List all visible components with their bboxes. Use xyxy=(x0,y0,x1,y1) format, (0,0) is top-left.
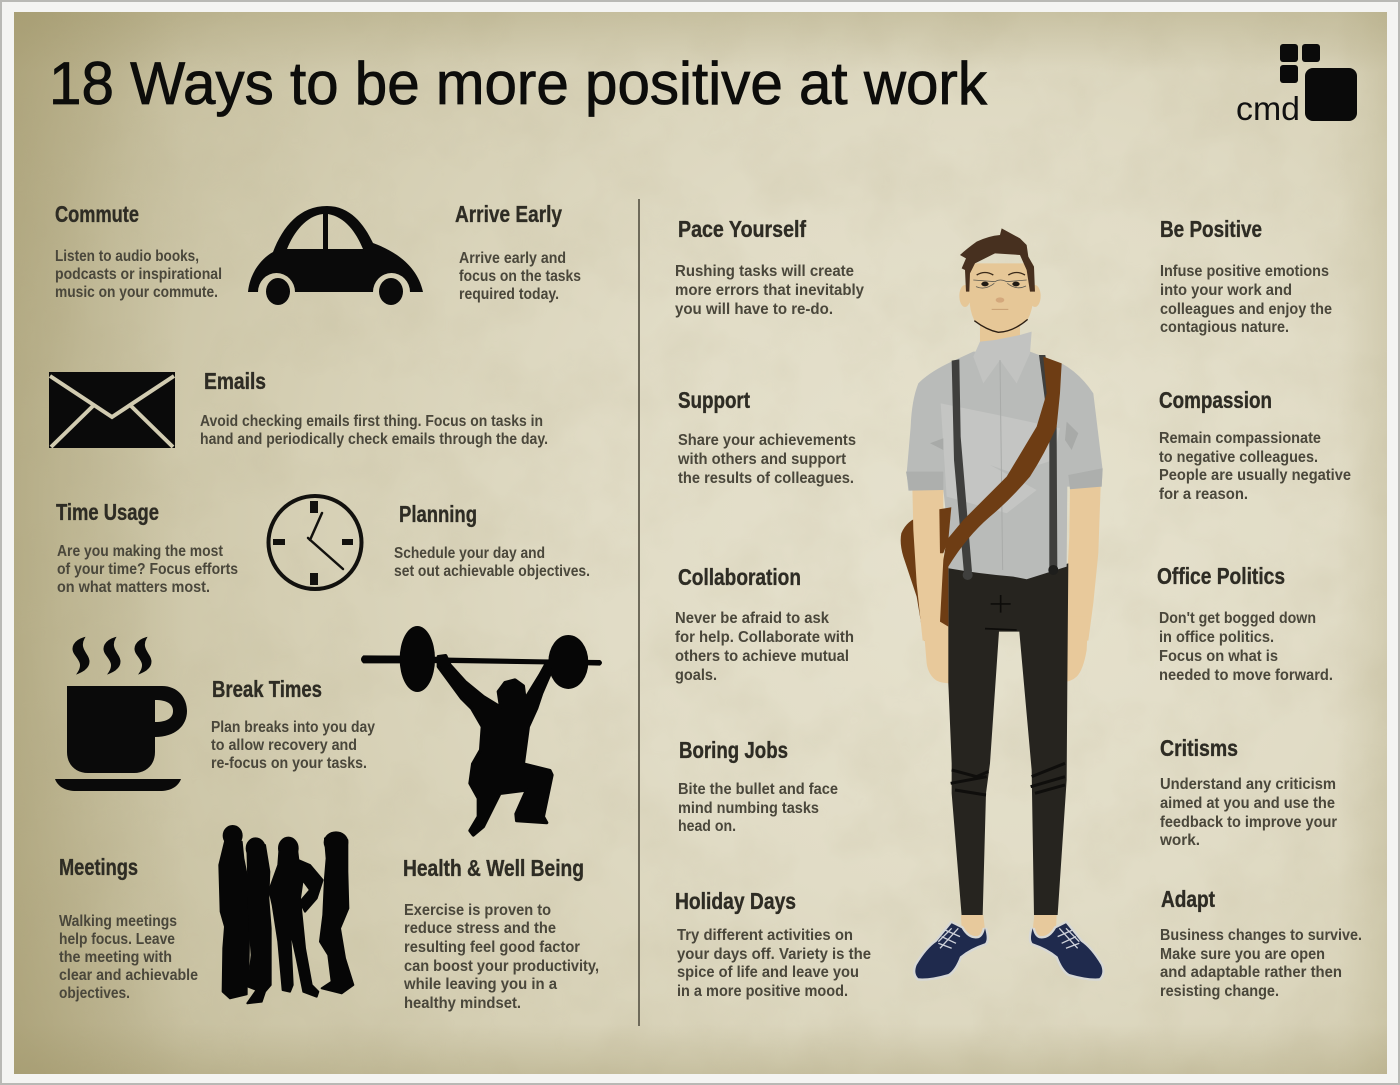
text: office politics: needed to move forward. xyxy=(1159,667,1333,684)
text: arrive early: focus on the tasks xyxy=(459,268,581,285)
heading: arrive early: Arrive Early xyxy=(455,201,562,227)
logo: cmd xyxy=(1236,44,1357,127)
text: pace yourself: you will have to re-do. xyxy=(675,301,833,318)
text: break times: to allow recovery and xyxy=(211,737,357,754)
text: health and well being: while leaving you in a xyxy=(403,976,557,993)
text: collaboration: for help. Collaborate with xyxy=(675,629,854,646)
man: head xyxy=(959,228,1041,332)
text: health and well being: resulting feel good factor xyxy=(404,939,580,956)
text: adapt: resisting change. xyxy=(1160,983,1279,1000)
heading: boring jobs: Boring Jobs xyxy=(679,737,788,763)
icon: coffee cup xyxy=(55,638,187,791)
text: collaboration xyxy=(675,610,854,684)
text: emails: hand and periodically check emails through the day. xyxy=(200,431,548,448)
text: critisms: work. xyxy=(1159,832,1200,849)
text: commute: Listen to audio books, xyxy=(55,248,199,265)
text: break times: re-focus on your tasks. xyxy=(211,755,367,772)
text: health and well being: can boost your productivity, xyxy=(404,958,599,975)
heading: health and well being: Health & Well Being xyxy=(403,855,584,881)
text: be positive: Infuse positive emotions xyxy=(1160,263,1329,280)
text: office politics xyxy=(1159,610,1333,684)
illustration: man with satchel xyxy=(901,228,1103,978)
text: boring jobs: Bite the bullet and face xyxy=(678,781,838,798)
heading: collaboration: Collaboration xyxy=(678,564,801,590)
panel: support xyxy=(677,387,856,487)
man: trousers xyxy=(948,563,1068,916)
text: holiday days: in a more positive mood. xyxy=(677,983,848,1000)
text: time usage: Are you making the most xyxy=(57,543,224,560)
heading: emails: Emails xyxy=(204,368,266,394)
text: support: Share your achievements xyxy=(678,432,856,449)
text: critisms: feedback to improve your xyxy=(1160,814,1337,831)
text: holiday days: your days off. Variety is the xyxy=(677,946,871,963)
text: meetings: Walking meetings xyxy=(59,913,177,930)
text: planning: Schedule your day and xyxy=(394,545,545,562)
icon: clock xyxy=(268,496,362,589)
text: critisms: aimed at you and use the xyxy=(1160,795,1335,812)
text: office politics: Don't get bogged down xyxy=(1159,610,1316,627)
panel: break times xyxy=(211,676,375,772)
heading: planning: Planning xyxy=(399,501,477,527)
panel: commute xyxy=(55,201,222,301)
text: health and well being: healthy mindset. xyxy=(404,995,521,1012)
icon: car xyxy=(248,206,423,292)
man: left shoe xyxy=(915,915,987,978)
text: boring jobs xyxy=(678,781,838,835)
text: holiday days: Try different activities on xyxy=(677,927,853,944)
text: boring jobs: mind numbing tasks xyxy=(678,800,819,817)
panel: collaboration xyxy=(675,564,854,684)
man: bag front flap xyxy=(939,507,951,553)
text: adapt: Make sure you are open xyxy=(1160,946,1325,963)
text: time usage: of your time? Focus efforts xyxy=(57,561,238,578)
text: office politics: in office politics. xyxy=(1159,629,1274,646)
icon: group of people xyxy=(219,826,353,1003)
text: commute xyxy=(55,248,222,301)
text: time usage xyxy=(57,543,238,596)
text: arrive early: Arrive early and xyxy=(459,250,566,267)
man: suspenders xyxy=(952,355,1058,580)
text: planning xyxy=(394,545,590,580)
title: 18 Ways to be more positive at work xyxy=(49,50,988,117)
text: emails: Avoid checking emails first thing. Focus on tasks in xyxy=(200,413,543,430)
man: right shoe xyxy=(1031,915,1102,978)
man: neck xyxy=(980,323,1020,358)
heading: office politics: Office Politics xyxy=(1157,563,1285,589)
text: adapt: Business changes to survive. xyxy=(1160,927,1362,944)
icon: envelope xyxy=(49,372,175,448)
text: break times xyxy=(211,719,375,772)
heading: break times: Break Times xyxy=(212,676,322,702)
text: collaboration: others to achieve mutual xyxy=(675,648,849,665)
text: health and well being xyxy=(403,902,599,1012)
text: arrive early xyxy=(459,250,581,303)
text: be positive: into your work and xyxy=(1160,282,1292,299)
panel: compassion xyxy=(1159,387,1351,503)
text: pace yourself xyxy=(675,263,864,318)
text: holiday days: spice of life and leave you xyxy=(677,964,859,981)
text: adapt: and adaptable rather then xyxy=(1160,964,1342,981)
text: arrive early: required today. xyxy=(459,286,559,303)
text: be positive: colleagues and enjoy the xyxy=(1160,301,1332,318)
heading: holiday days: Holiday Days xyxy=(675,888,796,914)
text: health and well being: Exercise is proven to xyxy=(404,902,551,919)
text: time usage: on what matters most. xyxy=(57,579,210,596)
text: adapt xyxy=(1160,927,1362,1000)
logo: cmd: cmd xyxy=(1236,90,1300,127)
divider xyxy=(638,199,640,1026)
text: pace yourself: Rushing tasks will create xyxy=(675,263,854,280)
text: boring jobs: head on. xyxy=(678,818,736,835)
heading: commute: Commute xyxy=(55,201,139,227)
panel: arrive early xyxy=(455,201,581,303)
text: office politics: Focus on what is xyxy=(1159,648,1278,665)
heading: time usage: Time Usage xyxy=(56,499,159,525)
man: arms xyxy=(912,487,1101,683)
text: support xyxy=(677,432,856,487)
text: meetings: objectives. xyxy=(59,985,130,1002)
man: bag back xyxy=(901,516,937,641)
heading: meetings: Meetings xyxy=(59,854,138,880)
text: commute: music on your commute. xyxy=(55,284,218,301)
text: support: with others and support xyxy=(677,451,847,468)
panel: adapt xyxy=(1160,886,1362,1000)
panel: emails xyxy=(200,368,548,448)
text: support: the results of colleagues. xyxy=(678,470,854,487)
heading: critisms: Critisms xyxy=(1160,735,1238,761)
panel: time usage xyxy=(56,499,238,596)
text: planning: set out achievable objectives. xyxy=(394,563,590,580)
heading: adapt: Adapt xyxy=(1161,886,1215,912)
text: collaboration: goals. xyxy=(675,667,717,684)
text: meetings: the meeting with xyxy=(59,949,172,966)
panel: be positive xyxy=(1160,216,1332,336)
text: collaboration: Never be afraid to ask xyxy=(675,610,829,627)
panel: critisms xyxy=(1159,735,1337,849)
heading: compassion: Compassion xyxy=(1159,387,1272,413)
text: pace yourself: more errors that inevitably xyxy=(675,282,864,299)
man: shirt xyxy=(906,332,1103,579)
text: meetings xyxy=(59,913,198,1002)
man: knee creases xyxy=(951,763,1065,795)
heading: be positive: Be Positive xyxy=(1160,216,1262,242)
panel: office politics xyxy=(1157,563,1333,684)
text: be positive xyxy=(1160,263,1332,336)
text: break times: Plan breaks into you day xyxy=(211,719,375,736)
text: compassion: People are usually negative xyxy=(1159,467,1351,484)
heading: pace yourself: Pace Yourself xyxy=(678,216,806,242)
text: be positive: contagious nature. xyxy=(1160,319,1289,336)
panel: holiday days xyxy=(675,888,871,1000)
text: compassion: for a reason. xyxy=(1159,486,1248,503)
text: compassion xyxy=(1159,430,1351,503)
text: compassion: to negative colleagues. xyxy=(1159,449,1318,466)
panel: boring jobs xyxy=(678,737,838,835)
icon: car wheels xyxy=(266,278,403,305)
icon: weightlifter xyxy=(361,626,602,835)
panel: planning xyxy=(394,501,590,580)
text: holiday days xyxy=(677,927,871,1000)
panel: pace yourself xyxy=(675,216,864,318)
panel: meetings xyxy=(59,854,198,1002)
text: meetings: help focus. Leave xyxy=(59,931,175,948)
text: critisms xyxy=(1159,776,1337,849)
text: emails xyxy=(200,413,548,448)
heading: support: Support xyxy=(678,387,750,413)
man: satchel strap xyxy=(940,357,1062,627)
panel: health and well being xyxy=(403,855,599,1012)
text: health and well being: reduce stress and the xyxy=(404,920,556,937)
text: meetings: clear and achievable xyxy=(59,967,198,984)
text: critisms: Understand any criticism xyxy=(1160,776,1336,793)
text: compassion: Remain compassionate xyxy=(1159,430,1321,447)
text: commute: podcasts or inspirational xyxy=(55,266,222,283)
man: crotch mark xyxy=(985,595,1017,630)
